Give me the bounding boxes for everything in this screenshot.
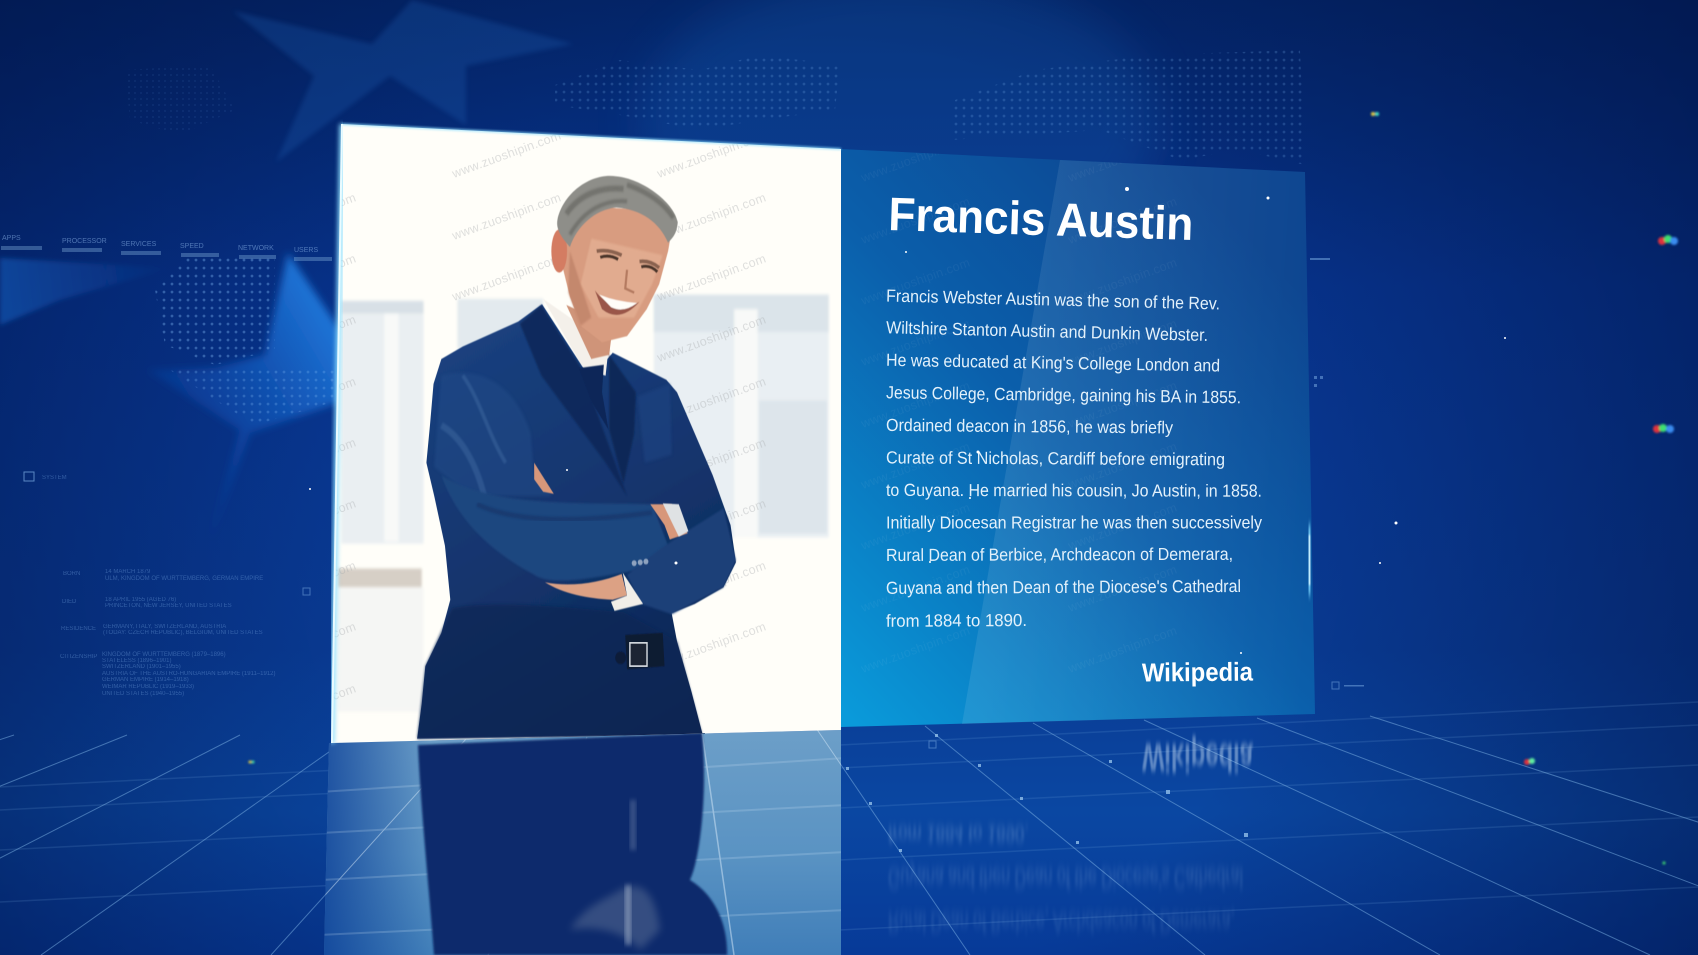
- watermarks on photo: www.zuoshipin.com: [654, 312, 768, 365]
- HUD small checkbox: SYSTEM: [42, 475, 67, 481]
- panel watermarks: www.zuoshipin.com: [1065, 194, 1179, 247]
- watermarks on photo: www.zuoshipin.com: [654, 619, 768, 672]
- HUD stat labels: NETWORK: [238, 245, 274, 252]
- man figure: [417, 176, 736, 739]
- panel body text: Francis Webster Austin was the son of the Rev.: [886, 286, 1220, 313]
- watermarks on photo: www.zuoshipin.com: [654, 128, 768, 181]
- suit shading: [520, 305, 627, 496]
- HUD stat labels: [1, 235, 332, 261]
- photo background windows: [334, 135, 830, 741]
- left light wedge: [0, 258, 170, 325]
- panel watermarks: www.zuoshipin.com: [858, 562, 972, 615]
- HUD biography text: 18 APRIL 1955 (AGED 76): [105, 597, 176, 603]
- reflection of panel text: Guyana and then Dean of the Diocese's Cathedral: [888, 861, 1243, 893]
- buttons: [632, 559, 648, 566]
- panel watermarks: www.zuoshipin.com: [1065, 562, 1179, 615]
- watermarks on photo: www.zuoshipin.com: [244, 681, 358, 734]
- watermarks on photo: [334, 135, 766, 700]
- HUD biography text: GERMAN EMPIRE (1914–1918): [102, 677, 189, 683]
- tie: [579, 365, 608, 430]
- watermarks on photo: www.zuoshipin.com: [654, 496, 768, 549]
- panel watermarks: www.zuoshipin.com: [1065, 132, 1179, 185]
- panel watermarks: www.zuoshipin.com: [1065, 623, 1179, 676]
- HUD stat labels: APPS: [2, 235, 21, 242]
- HUD biography text: CITIZENSHIP: [60, 654, 97, 660]
- watermarks on photo: www.zuoshipin.com: [244, 496, 358, 549]
- HUD biography text: WEIMAR REPUBLIC (1919–1933): [102, 684, 194, 690]
- watermarks on photo: www.zuoshipin.com: [654, 251, 768, 304]
- panel watermarks: www.zuoshipin.com: [858, 378, 972, 431]
- crossed forearm: [441, 475, 668, 581]
- HUD biography text: (TODAY: CZECH REPUBLIC), BELGIUM, UNITED STATES: [103, 630, 263, 636]
- panel watermarks: www.zuoshipin.com: [1065, 255, 1179, 308]
- panel body text: Ordained deacon in 1856, he was briefly: [886, 415, 1173, 438]
- eyes and brows: [597, 251, 659, 268]
- HUD biography text: BORN: [63, 571, 80, 577]
- panel title: Francis Austin: [888, 187, 1194, 250]
- HUD biography text: DIED: [62, 599, 77, 605]
- panel watermarks: www.zuoshipin.com: [858, 500, 972, 553]
- HUD biography text: ULM, KINGDOM OF WÜRTTEMBERG, GERMAN EMPIRE: [105, 575, 263, 582]
- HUD biography text: [60, 569, 310, 697]
- panel body text: Curate of St Nicholas, Cardiff before emigrating: [886, 447, 1225, 469]
- watermarks on photo: www.zuoshipin.com: [449, 128, 563, 181]
- head: [551, 176, 678, 342]
- panel watermarks: www.zuoshipin.com: [858, 132, 972, 185]
- HUD biography text: GERMANY, ITALY, SWITZERLAND, AUSTRIA: [103, 624, 226, 630]
- HUD biography text: SWITZERLAND (1901–1955): [102, 664, 181, 670]
- floor grid nodes: [846, 734, 1248, 852]
- right side HUD marks: [929, 258, 1364, 748]
- watermarks on photo: www.zuoshipin.com: [244, 435, 358, 488]
- lower suit shadow: [417, 604, 702, 739]
- belt and buckle: [625, 633, 665, 669]
- HUD biography text: RESIDENCE: [61, 626, 96, 632]
- panel watermarks: www.zuoshipin.com: [858, 623, 972, 676]
- panel watermarks: www.zuoshipin.com: [858, 194, 972, 247]
- panel watermarks: www.zuoshipin.com: [858, 439, 972, 492]
- HUD stat labels: SPEED: [180, 243, 204, 250]
- panel body text: [886, 286, 1262, 631]
- photo card: portrait of a smiling businessman: [244, 124, 841, 744]
- HUD small checkbox: [24, 472, 67, 481]
- watermarks on photo: www.zuoshipin.com: [244, 619, 358, 672]
- world map halftone: [125, 50, 1305, 165]
- panel watermarks: [858, 132, 1179, 676]
- watermarks on photo: www.zuoshipin.com: [244, 190, 358, 243]
- panel body text: Rural Dean of Berbice, Archdeacon of Demerara,: [886, 544, 1233, 565]
- panel body text: Jesus College, Cambridge, gaining his BA in 1855.: [886, 382, 1241, 407]
- suit body: [417, 304, 736, 739]
- panel sheen: [962, 160, 1315, 724]
- reflection of Wikipedia label: Wikipedia: [1142, 735, 1253, 778]
- HUD biography text: AUSTRIA OF THE AUSTRO-HUNGARIAN EMPIRE (1911–1912): [102, 671, 276, 677]
- floor grid: [0, 702, 1698, 955]
- panel body text: to Guyana. He married his cousin, Jo Austin, in 1858.: [886, 480, 1262, 501]
- panel body text: He was educated at King's College London and: [886, 350, 1220, 376]
- HUD stat labels: USERS: [294, 247, 318, 254]
- watermarks on photo: www.zuoshipin.com: [449, 190, 563, 243]
- panel watermarks: www.zuoshipin.com: [1065, 500, 1179, 553]
- decorative star left with halftone: [147, 253, 345, 540]
- sparkle particles: [248, 112, 1678, 864]
- reflection of panel text: Rural Dean of Berbice, Archdeacon of Demerara,: [888, 905, 1235, 937]
- watermarks on photo: www.zuoshipin.com: [654, 374, 768, 427]
- watermarks on photo: www.zuoshipin.com: [244, 251, 358, 304]
- watermarks on photo: www.zuoshipin.com: [654, 190, 768, 243]
- panel watermarks: www.zuoshipin.com: [858, 316, 972, 369]
- panel watermarks: www.zuoshipin.com: [858, 255, 972, 308]
- panel watermarks: www.zuoshipin.com: [1065, 378, 1179, 431]
- card edge glow: [332, 124, 1310, 743]
- HUD stat labels: SERVICES: [121, 241, 157, 248]
- panel source credit: Wikipedia: [1142, 657, 1254, 687]
- nose and mouth: [625, 270, 634, 293]
- watermarks on photo: www.zuoshipin.com: [449, 251, 563, 304]
- panel body text: Initially Diocesan Registrar he was then successively: [886, 512, 1262, 532]
- watermarks on photo: www.zuoshipin.com: [244, 312, 358, 365]
- watermarks on photo: www.zuoshipin.com: [654, 435, 768, 488]
- HUD stat labels: PROCESSOR: [62, 238, 107, 245]
- blue text panel: [841, 132, 1315, 727]
- panel body text: Guyana and then Dean of the Diocese's Cathedral: [886, 576, 1241, 598]
- decorative star top: [233, 0, 573, 162]
- hands and cuffs: [534, 463, 554, 494]
- watermarks on photo: www.zuoshipin.com: [654, 558, 768, 611]
- panel body text: from 1884 to 1890.: [886, 610, 1027, 631]
- photo bottom dark edge: [418, 733, 705, 741]
- HUD biography text: PRINCETON, NEW JERSEY, UNITED STATES: [105, 603, 232, 609]
- reflection of panel text: [888, 820, 1243, 937]
- HUD biography text: KINGDOM OF WÜRTTEMBERG (1879–1896): [102, 651, 226, 658]
- HUD biography text: UNITED STATES (1940–1955): [102, 691, 184, 697]
- reflection of panel text: from 1884 to 1890.: [888, 820, 1029, 846]
- panel body text: Wiltshire Stanton Austin and Dunkin Webster.: [886, 317, 1208, 345]
- watermarks on photo: www.zuoshipin.com: [244, 374, 358, 427]
- HUD biography text: 14 MARCH 1879: [105, 569, 151, 575]
- hair: [557, 176, 678, 247]
- watermarks on photo: www.zuoshipin.com: [244, 558, 358, 611]
- HUD biography text: STATELESS (1896–1901): [102, 658, 171, 664]
- neck and shirt: [543, 299, 611, 376]
- reflection of card on the floor: [324, 730, 841, 955]
- panel watermarks: www.zuoshipin.com: [1065, 439, 1179, 492]
- panel watermarks: www.zuoshipin.com: [1065, 316, 1179, 369]
